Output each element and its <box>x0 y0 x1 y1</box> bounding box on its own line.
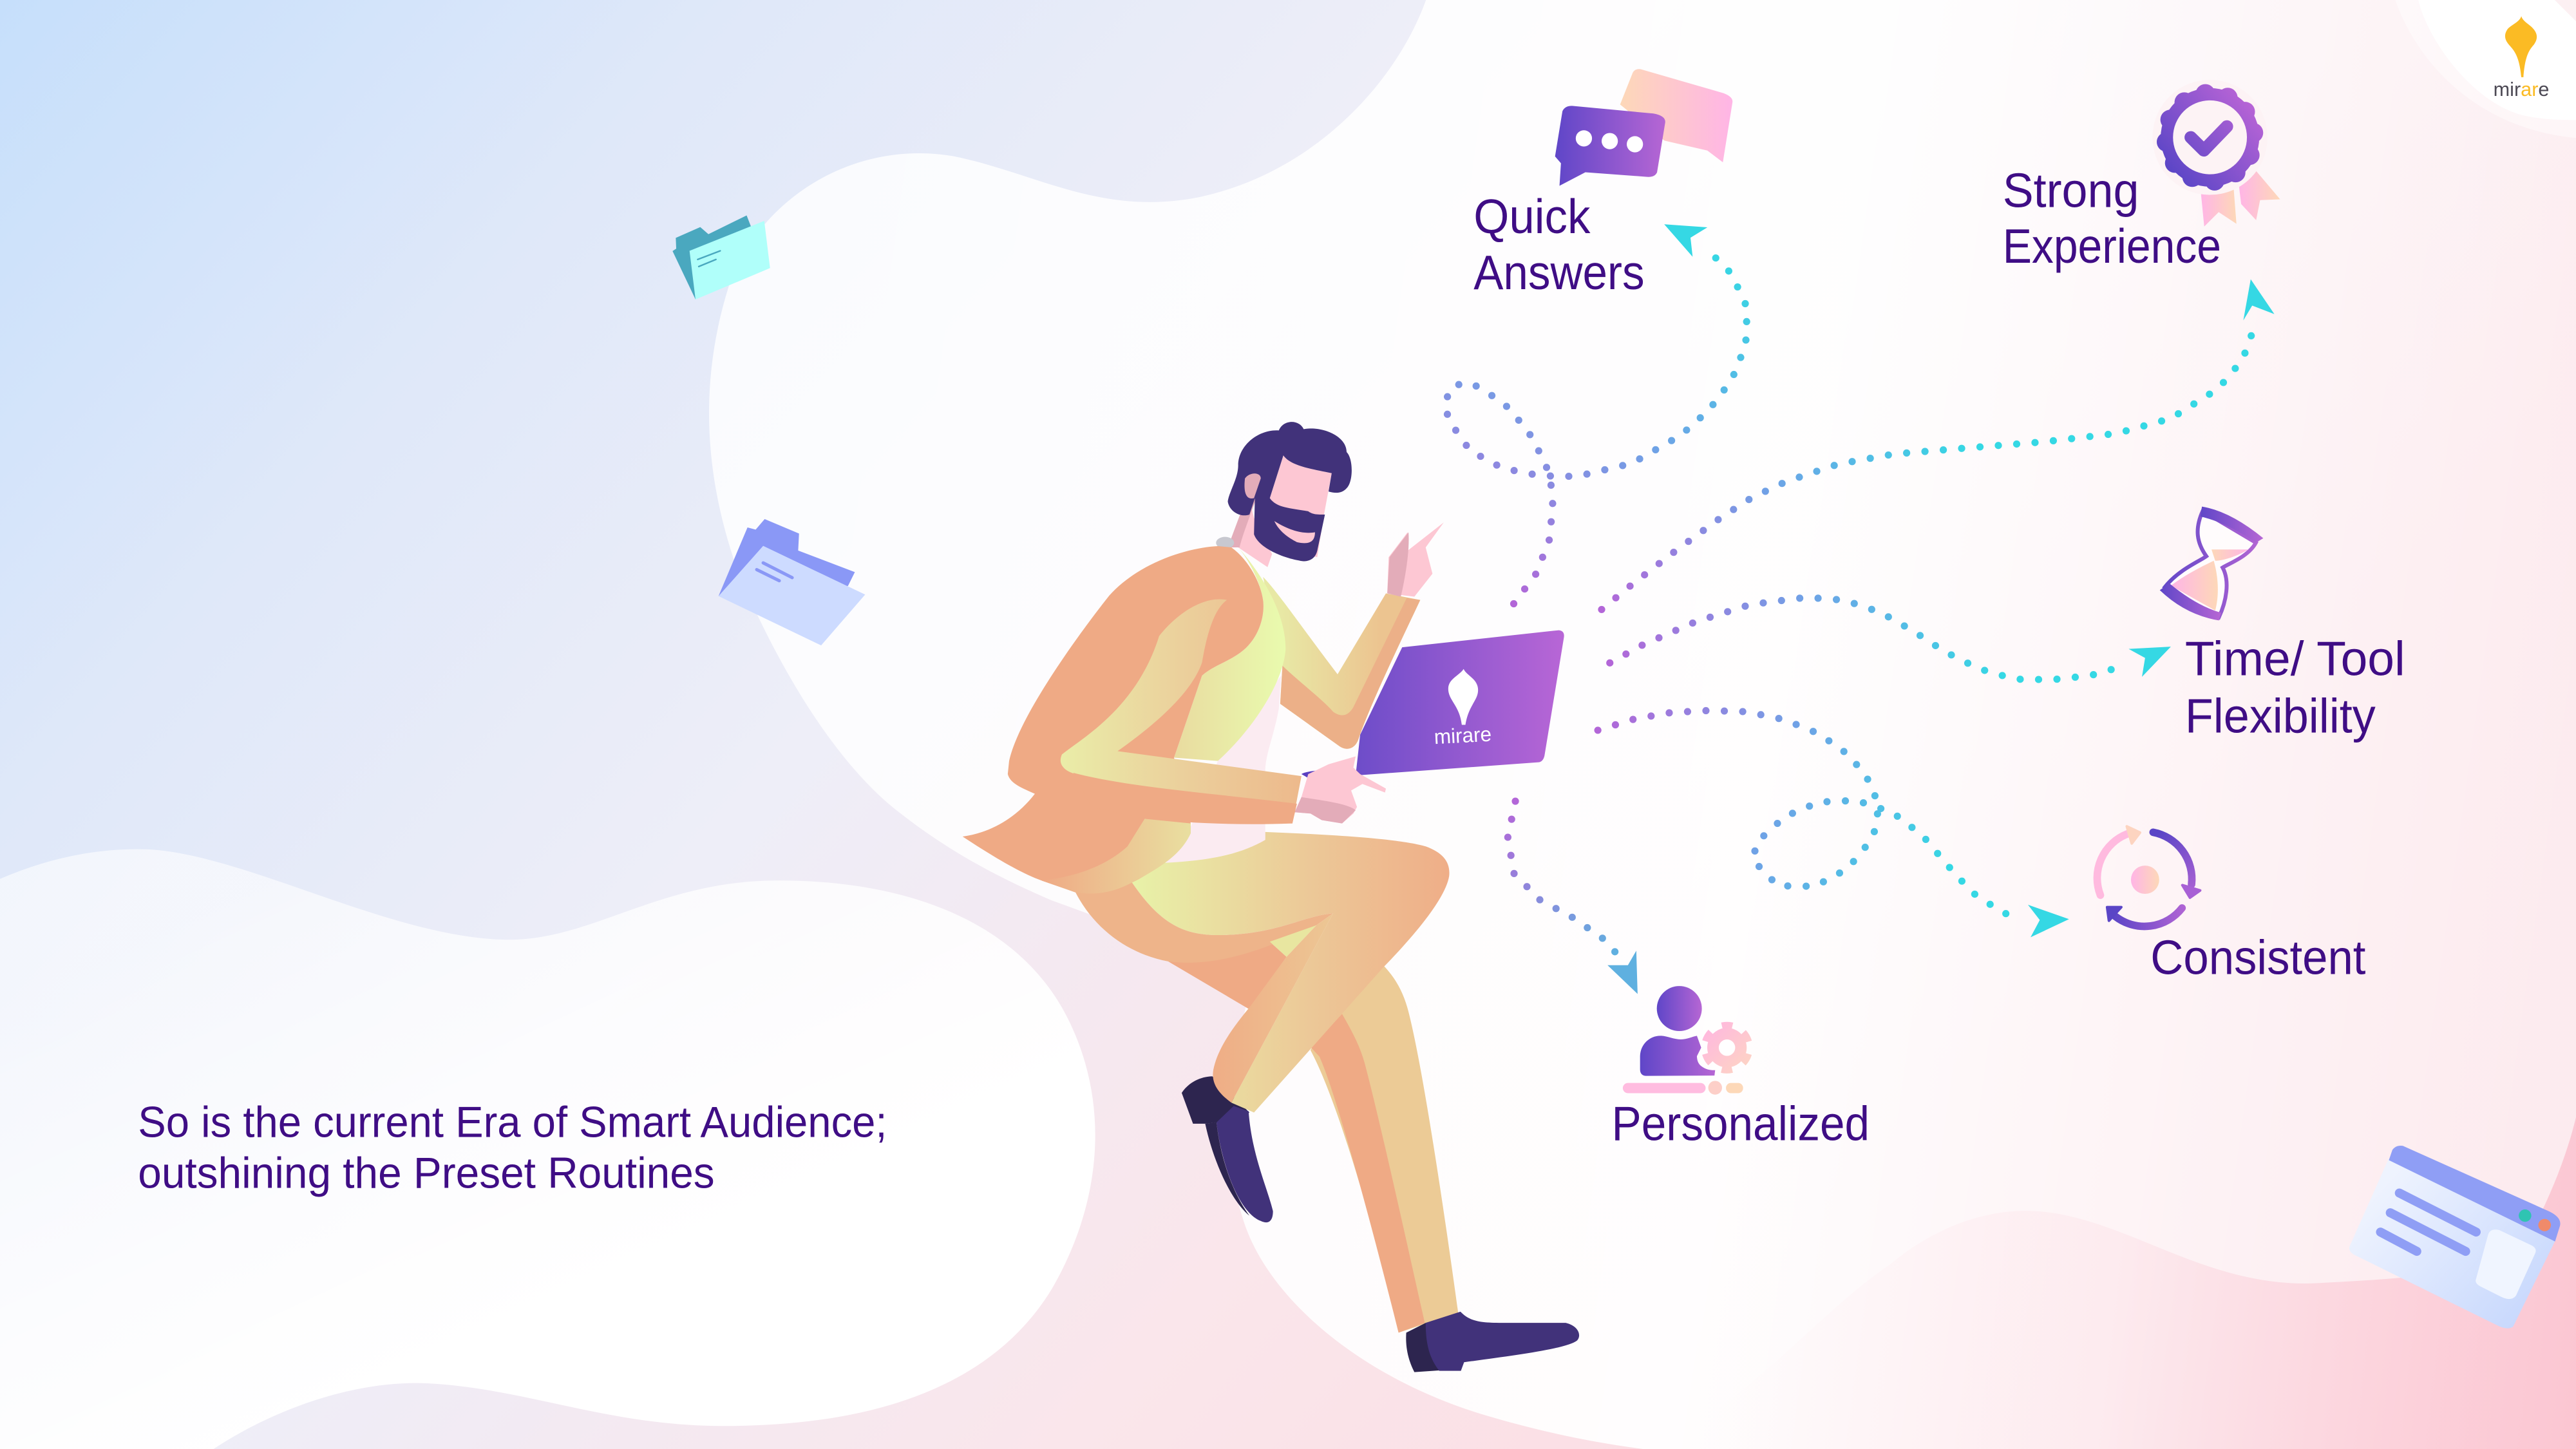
jacket <box>963 546 1264 894</box>
icon: hourglass <box>2160 507 2263 620</box>
jacket tail highlight <box>1041 819 1191 894</box>
body text: outshining the Preset Routines <box>138 1149 715 1197</box>
background blob: logo corner <box>2395 0 2576 138</box>
label: Quick Answers: Answers <box>1473 245 1645 299</box>
dotted arrow to Consistent <box>1598 710 2069 937</box>
icon: browser window <box>2349 1146 2561 1329</box>
dotted arrow to Strong Experience <box>1602 279 2275 609</box>
shirt <box>1166 676 1281 863</box>
body text: So is the current Era of Smart Audience; <box>138 1098 887 1146</box>
front leg <box>1075 832 1450 1113</box>
illustration: man with laptop <box>963 422 1579 1372</box>
icon: teal folder <box>672 215 770 299</box>
foreground hand <box>1294 756 1386 824</box>
icon: blue folder <box>719 519 865 645</box>
neck <box>1216 498 1272 567</box>
label: Strong Experience: Strong <box>2003 163 2139 217</box>
raised shoe <box>1182 1076 1273 1222</box>
icon: award badge <box>2152 80 2280 227</box>
background blob: central white shape <box>709 0 2576 1449</box>
label: Strong Experience <box>2003 163 2221 273</box>
laptop <box>1302 630 1564 778</box>
foreground sleeve <box>1061 599 1302 824</box>
raised arm <box>1263 577 1420 749</box>
label: Consistent: Consistent <box>2150 931 2366 985</box>
label: Strong Experience: Experience <box>2003 219 2221 273</box>
dotted arrow to Quick Answers <box>1445 224 1747 604</box>
label: Time/ Tool Flexibility: Time/ Tool <box>2185 631 2405 685</box>
label: Quick Answers: Quick <box>1473 189 1591 243</box>
logo: mirare <box>2494 16 2549 100</box>
label: Personalized: Personalized <box>1612 1096 1870 1150</box>
vest <box>1174 547 1285 761</box>
laptop wordmark: mirare <box>1434 723 1492 748</box>
background blob: bottom-left white shape <box>0 849 1095 1449</box>
label: Quick Answers <box>1473 189 1645 299</box>
body text <box>138 1098 887 1197</box>
dotted arrow to Personalized <box>1508 801 1638 994</box>
label: Time/ Tool Flexibility <box>2185 631 2405 743</box>
icon: cycle arrows <box>2097 826 2200 926</box>
label: Time/ Tool Flexibility: Flexibility <box>2185 689 2376 743</box>
logo wordmark: mirare <box>2494 79 2549 100</box>
dotted arrow to Time/ Tool Flexibility <box>1610 598 2171 679</box>
thigh underside <box>1168 942 1287 1009</box>
logo icon: yellow leaf <box>2505 16 2537 77</box>
background wave: bottom-right pink <box>1643 1117 2576 1449</box>
icon: chat bubbles <box>1555 69 1732 186</box>
pointing hand <box>1387 522 1444 597</box>
front shoe <box>1406 1312 1579 1372</box>
back leg <box>1311 965 1458 1332</box>
head <box>1228 422 1352 561</box>
icon: person with gear <box>1623 986 1750 1095</box>
